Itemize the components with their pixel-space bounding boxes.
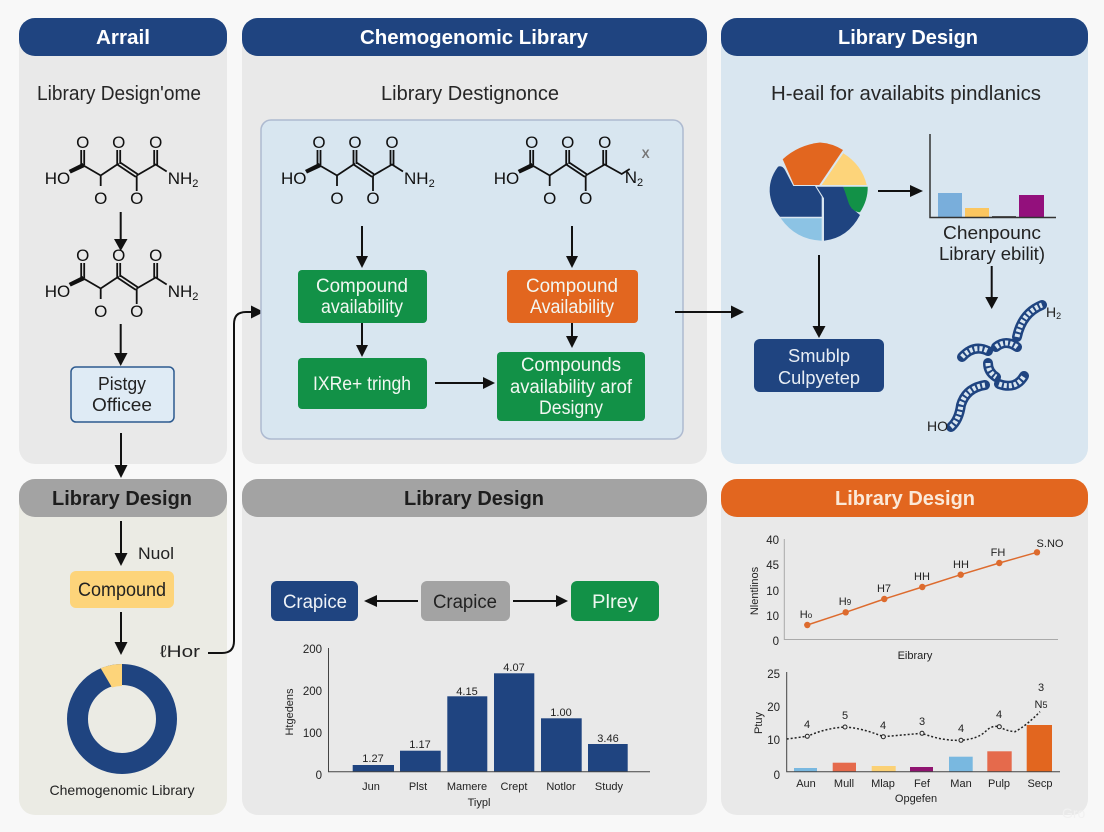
small bar chart [930,134,1056,218]
molecule 4: N [625,168,637,187]
line chart: 10 [766,586,779,598]
heading: Chemogenomic Library [242,18,707,56]
molecule 3: NH [404,169,429,188]
box: Compound Availability orange: Compound [526,276,618,297]
box: IXRe+ tringh: IXRe+ tringh [313,374,411,395]
arrow: elbow to center panel [208,306,264,653]
line chart: 0 [773,636,779,648]
molecule 1: O [76,133,89,152]
combo chart: bars and dotted line: Ptuy [753,711,765,734]
heading: Arrail: Arrail [96,27,150,49]
combo chart: bars and dotted line: Pulp [988,778,1010,790]
box: Smublp Culpyetep: Culpyetep [778,368,860,388]
heading: Chemogenomic Library: Chemogenomic Library [360,27,589,49]
line chart: FH [991,547,1005,559]
molecule 1: NH [168,169,192,188]
combo chart: bars and dotted line: Mlap [871,778,895,790]
box: Pistgy Officee: Officee [92,395,152,415]
arrow: to bottom left panel [114,433,128,478]
donut chart [78,664,166,764]
bar chart: center: 4.15 [456,686,478,698]
panel: Library Design top right [721,18,1088,464]
box: Compounds availability: availability arof [510,377,633,398]
molecule 2: NH [168,282,192,301]
box: Pistgy Officee [71,367,174,422]
molecule 1: HO [45,169,70,188]
inner panel: flow [261,120,683,439]
heading: Library Design gray center [242,479,707,517]
line chart: Ho [800,609,813,621]
molecule 3: O [385,133,399,152]
label: Hor: ℓHor [159,642,200,661]
combo chart: bars and dotted line: Fef [914,778,931,790]
panel: Library Design bottom left [19,479,227,815]
bar chart: center: 1.17 [409,739,431,751]
bar chart: center: 3.46 [597,733,619,745]
molecule 4: HO [494,169,519,188]
bar chart: center: 0 [316,770,322,782]
combo chart: bars and dotted line: 0 [774,770,780,782]
combo chart: bars and dotted line: N5 [1035,699,1047,711]
box: Compound Availability orange [507,270,638,323]
combo chart: bars and dotted line [753,669,1060,805]
combo chart: bars and dotted line: 3 [919,716,925,728]
bar chart: center: Plst [409,781,427,793]
molecule 2: O [76,246,89,265]
bar chart: center: Crept [501,781,527,793]
bar chart: center: 1.00 [550,707,572,719]
bar chart: center: Htgedens [284,688,296,736]
combo chart: bars and dotted line: Opgefen [895,793,937,805]
combo chart: bars and dotted line: 5 [842,710,848,722]
heading: Library Design orange: Library Design [835,488,975,510]
molecule 2 [45,246,198,321]
line chart: 10 [766,611,779,623]
bar chart: center: 200 [303,644,322,656]
combo chart: bars and dotted line: Aun [796,778,816,790]
molecule 2: O [130,302,143,321]
label: Chenpounc Library ebilit [939,223,1045,264]
label: Chenpounc Library ebilit: Chenpounc [943,223,1041,243]
label: Nuol: Nuol [138,544,174,563]
arrow: molecule 2 down [114,324,128,366]
box: Smublp Culpyetep [754,339,884,392]
heading: Library Design: Library Design [838,27,978,49]
molecule 4 [494,133,650,208]
subtitle: Library Destignonce: Library Destignonce [381,83,559,105]
arrow: center to right panel [675,306,744,318]
box: Compounds availability: Compounds [521,355,621,376]
arrow: to left [364,595,418,607]
molecule 3: O [366,189,380,208]
box: IXRe+ tringh [298,358,427,409]
box: Plrey [571,581,659,621]
molecule 4: O [543,189,556,208]
line chart: Eibrary [898,650,933,662]
combo chart: bars and dotted line: 3 [1038,682,1044,694]
molecule 4: O [561,133,574,152]
heading: Library Design gray center: Library Design [404,488,544,510]
box: Pistgy Officee: Pistgy [98,374,146,394]
molecule 3 [281,133,435,208]
molecule 1 [45,133,198,208]
combo chart: bars and dotted line: 4 [880,720,886,732]
bar chart: center [284,644,650,809]
combo chart: bars and dotted line: Secp [1027,778,1053,790]
pie chart [770,142,868,241]
line chart: H9 [839,596,852,608]
bar chart: center: Mamere [447,781,487,793]
line chart [749,535,1064,662]
molecule 4: O [525,133,538,152]
molecule 2: HO [45,282,70,301]
label: H2: 2 [1056,311,1061,321]
arrow: orange to green [566,323,578,348]
label: Chenpounc Library ebilit: Library ebilit) [939,244,1045,264]
line chart: H7 [877,583,891,595]
arrow: green to green [356,323,368,357]
bar chart: center: 4.07 [503,662,525,674]
box: Compound Availability orange: Availability [530,297,614,318]
bar chart: center: Jun [362,781,380,793]
box: Plrey: Plrey [592,592,639,613]
arrow: header to compound [114,521,128,566]
arrow: molecule 1 down [114,212,128,251]
molecule 3: O [348,133,362,152]
line chart: 40 [766,535,779,547]
arrow: molecule 3 down [356,226,368,268]
panel: Library Design bottom center [242,479,707,815]
heading: Library Design orange [721,479,1088,517]
molecule 1: O [149,133,162,152]
label: H2: H [1046,304,1056,320]
label: HO: HO [927,418,948,434]
heading: Library Design gray: Library Design [52,488,192,510]
panel: Library Design bottom right [721,479,1088,815]
heading: Library Design [721,18,1088,56]
box: Crapice navy [271,581,358,621]
line chart: Nlentlinos [749,566,761,615]
molecule 2: O [149,246,162,265]
arrow: compound to donut [114,612,128,655]
subtitle: Library Designome: Library Design'ome [37,83,201,105]
watermark: Gro [1062,805,1086,821]
box: Crapice navy: Crapice [283,592,347,613]
molecule 4: O [598,133,611,152]
box: Compound availability green: availability [321,297,403,318]
heading: Library Design gray [19,479,227,517]
subtitle: availability: H-eail for availabits pindlanics [771,83,1041,105]
line chart: 45 [766,560,779,572]
bar chart: center: 200 [303,686,322,698]
arrow: to compounds [435,377,495,389]
molecule 3: 2 [429,178,435,190]
molecule 2: 2 [192,291,198,303]
molecule 2: O [94,302,107,321]
molecule 3: O [330,189,344,208]
combo chart: bars and dotted line: Mull [834,778,854,790]
combo chart: bars and dotted line: 4 [958,723,964,735]
bar chart: center: 1.27 [362,753,384,765]
bar chart: center: Study [595,781,624,793]
panel: Chemogenomic Library [242,18,707,464]
combo chart: bars and dotted line: 20 [767,702,780,714]
combo chart: bars and dotted line: Man [950,778,972,790]
panel: Arrail [19,18,227,464]
molecule 1: O [130,189,143,208]
box: Crapice gray: Crapice [433,592,497,613]
combo chart: bars and dotted line: 10 [767,735,780,747]
combo chart: bars and dotted line: 4 [996,709,1002,721]
arrow: molecule 4 down [566,226,578,268]
molecule 1: O [94,189,107,208]
molecule 3: O [312,133,326,152]
label: Chemogenomic Library: Chemogenomic Library [50,782,194,798]
bar chart: center: 100 [303,728,322,740]
arrow: pie to bars [878,185,923,197]
molecule 3: HO [281,169,306,188]
molecule 1: 2 [192,178,198,190]
box: Compound availability green [298,270,427,323]
arrow: bars down [985,266,998,309]
combo chart: bars and dotted line: 4 [804,719,810,731]
bar chart: center: Tiypl [468,797,490,809]
combo chart: bars and dotted line: 25 [767,669,780,681]
box: Compound availability green: Compound [316,276,408,297]
molecule 4: 2 [637,177,643,189]
box: Compound: Compound [78,580,166,601]
box: Crapice gray [421,581,510,621]
box: Compound [70,571,174,608]
box: Smublp Culpyetep: Smublp [788,346,850,366]
molecule 4: O [579,189,592,208]
line chart: S.NO [1037,538,1064,550]
arrow: pie down [812,255,826,338]
icon: DNA strand [927,304,1061,434]
line chart: HH [953,559,969,571]
arrow: to right [513,595,568,607]
molecule 1: O [112,133,125,152]
bar chart: center: Notlor [546,781,576,793]
heading: Arrail [19,18,227,56]
box: Compounds availability [497,352,645,421]
line chart: HH [914,571,930,583]
box: Compounds availability: Designy [539,398,603,419]
molecule 4: X [642,147,650,161]
molecule 2: O [112,246,125,265]
